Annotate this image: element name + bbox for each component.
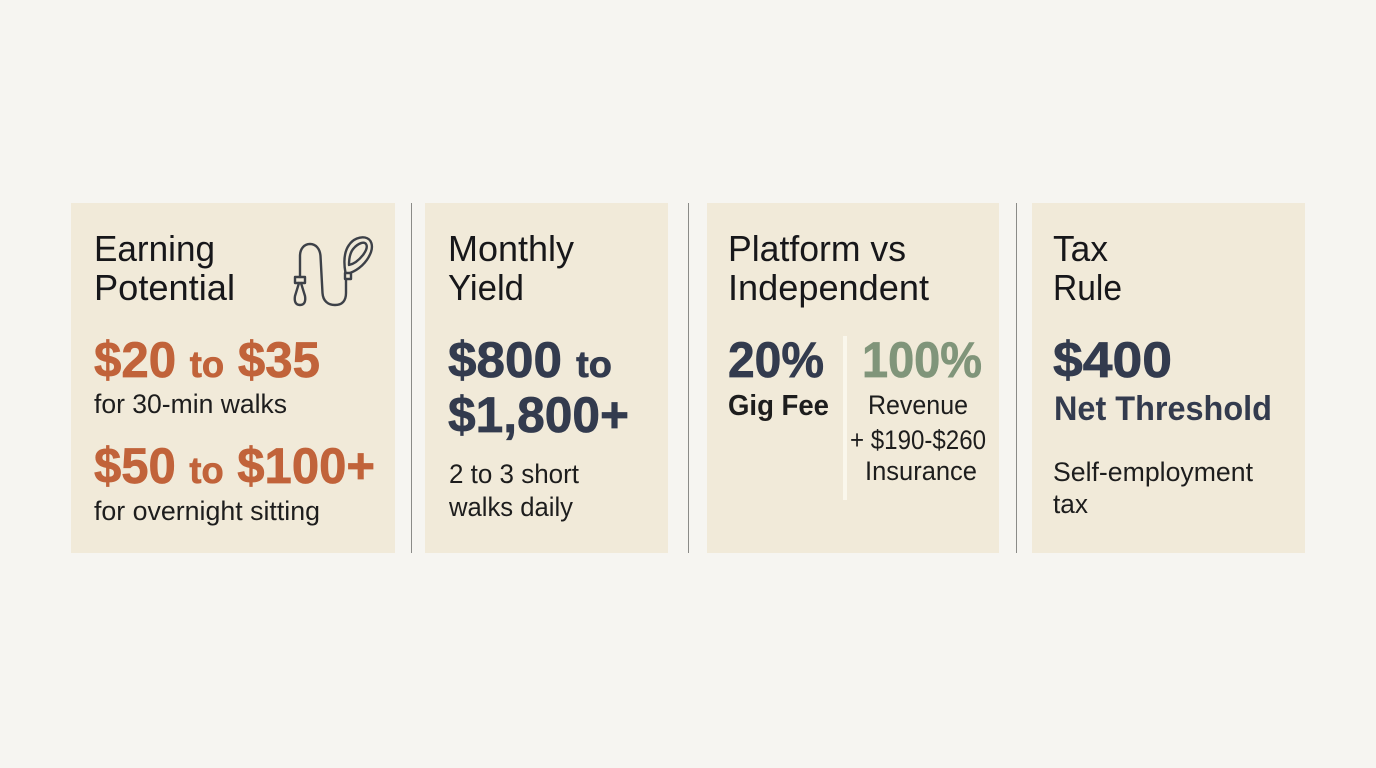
stat: independent revenue: Revenue — [868, 390, 968, 420]
panel: earning potential — [71, 203, 395, 553]
panel: tax rule — [1032, 203, 1305, 553]
figure: net threshold — [1053, 332, 1272, 428]
figure: monthly range: $1,800+ — [448, 387, 629, 443]
heading: platform vs independent — [728, 228, 929, 308]
stat: gig fee — [728, 332, 829, 422]
text: self-employment tax: Self-employment — [1053, 457, 1253, 487]
heading: earning potential: Earning — [94, 228, 215, 269]
heading: tax rule — [1053, 228, 1122, 308]
heading: platform vs independent: Independent — [728, 267, 929, 308]
text: walks per day — [448, 459, 579, 522]
stat: independent revenue: 100% — [862, 332, 982, 388]
figure: net threshold: $400 — [1053, 332, 1172, 388]
figure: monthly range — [448, 332, 629, 443]
stat: independent revenue: Insurance — [865, 456, 977, 486]
heading: tax rule: Tax — [1053, 228, 1108, 269]
heading: monthly yield: Monthly — [448, 228, 574, 269]
heading: monthly yield — [448, 228, 574, 308]
heading: platform vs independent: Platform vs — [728, 228, 906, 269]
heading: tax rule: Rule — [1053, 267, 1122, 308]
icon: leash — [295, 237, 372, 305]
stat: gig fee: 20% — [728, 332, 824, 388]
text: self-employment tax: tax — [1053, 489, 1088, 519]
heading: monthly yield: Yield — [448, 267, 524, 308]
heading: earning potential — [94, 228, 235, 308]
text: self-employment tax — [1053, 457, 1253, 519]
stat: independent revenue — [850, 332, 986, 486]
price: 30-min walks: $20 to $35 — [94, 332, 320, 388]
stat: gig fee: Gig Fee — [728, 390, 829, 422]
price: overnight sitting: $50 to $100+ — [94, 438, 375, 494]
text: walks per day: 2 to 3 short — [449, 459, 579, 489]
label: 30-min walks: for 30-min walks — [94, 389, 287, 419]
stat: independent revenue: + $190-$260 — [850, 425, 986, 455]
figure: monthly range: $800 to — [448, 332, 612, 388]
panel: monthly yield — [425, 203, 668, 553]
figure: net threshold: Net Threshold — [1054, 390, 1272, 428]
heading: earning potential: Potential — [94, 267, 235, 308]
label: overnight sitting: for overnight sitting — [94, 496, 320, 526]
panel: platform vs independent — [707, 203, 999, 553]
text: walks per day: walks daily — [448, 492, 573, 522]
